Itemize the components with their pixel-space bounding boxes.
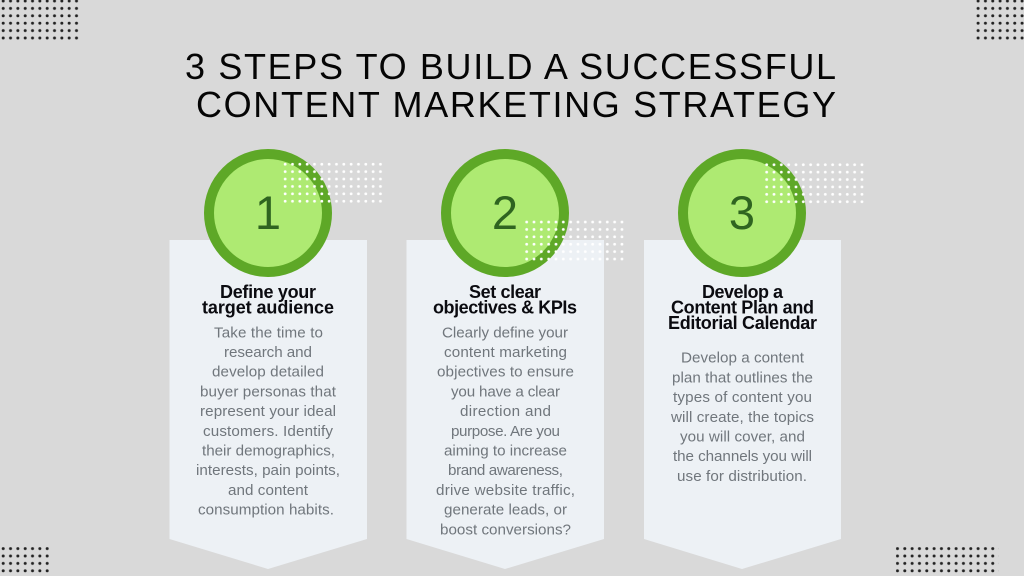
card 1 shape	[170, 240, 367, 569]
title: CONTENT MARKETING STRATEGY	[196, 84, 836, 125]
body text 3: you will cover, and	[680, 428, 805, 446]
heading 3	[668, 282, 817, 333]
body text 3: Develop a content	[681, 350, 805, 367]
body text 2: you have a clear	[451, 383, 560, 400]
card 2 shape	[406, 240, 604, 569]
body text 1: and content	[228, 482, 309, 499]
white dots 1	[282, 160, 384, 205]
body text 1: customers. Identify	[203, 423, 333, 440]
heading 2: Set clear	[469, 282, 541, 302]
body text 3: plan that outlines the	[672, 369, 813, 386]
body text 2: Clearly define your	[442, 324, 568, 341]
dot grid: bottom left	[0, 547, 51, 576]
heading 1	[202, 282, 334, 318]
body text 1: consumption habits.	[198, 502, 334, 519]
panel: step 3	[644, 154, 866, 569]
panel: step 2	[406, 154, 626, 569]
white dots 3	[763, 161, 866, 205]
body text 2	[436, 324, 575, 538]
white dots 2	[523, 218, 626, 263]
body text 1: research and	[224, 344, 312, 361]
body text 1: Take the time to	[214, 324, 323, 341]
dot grid: top right	[973, 0, 1024, 42]
body text 2: content marketing	[444, 344, 567, 361]
heading 3: Editorial Calendar	[668, 313, 817, 333]
body text 2: generate leads, or	[444, 502, 567, 519]
body text 3: the channels you will	[673, 448, 812, 465]
body text 2: purpose. Are you	[451, 423, 560, 440]
heading 2	[433, 282, 577, 318]
heading 3: Develop a	[702, 282, 784, 302]
body text 1: their demographics,	[202, 442, 335, 460]
badge 2	[446, 154, 564, 272]
badge 1	[209, 154, 327, 272]
heading 1: Define your	[220, 282, 316, 302]
heading 3: Content Plan and	[671, 298, 814, 318]
heading 1: target audience	[202, 298, 334, 318]
body text 1	[196, 324, 340, 519]
body text 1: interests, pain points,	[196, 462, 340, 479]
body text 2: brand awareness,	[448, 462, 563, 479]
heading 2: objectives & KPIs	[433, 298, 577, 318]
body text 1: develop detailed	[212, 364, 324, 381]
body text 2: boost conversions?	[440, 521, 571, 538]
body text 3: will create, the topics	[670, 409, 814, 426]
title	[185, 46, 836, 125]
badge 1: 1	[255, 186, 281, 239]
dot grid: bottom right	[896, 547, 998, 576]
body text 3: use for distribution.	[677, 468, 807, 485]
body text 2: aiming to increase	[444, 442, 567, 460]
body text 1: represent your ideal	[200, 403, 336, 420]
body text 2: direction and	[460, 403, 551, 420]
panel: step 1	[170, 154, 384, 569]
title: 3 STEPS TO BUILD A SUCCESSFUL	[185, 46, 836, 87]
body text 3: types of content you	[673, 389, 812, 406]
badge 2: 2	[492, 186, 518, 239]
card 3 shape	[644, 240, 841, 569]
body text 3	[670, 350, 814, 485]
dot grid: top left	[0, 0, 80, 42]
body text 2: objectives to ensure	[437, 364, 574, 381]
badge 3	[683, 154, 801, 272]
body text 1: buyer personas that	[200, 383, 337, 400]
badge 3: 3	[729, 186, 755, 239]
body text 2: drive website traffic,	[436, 482, 575, 499]
